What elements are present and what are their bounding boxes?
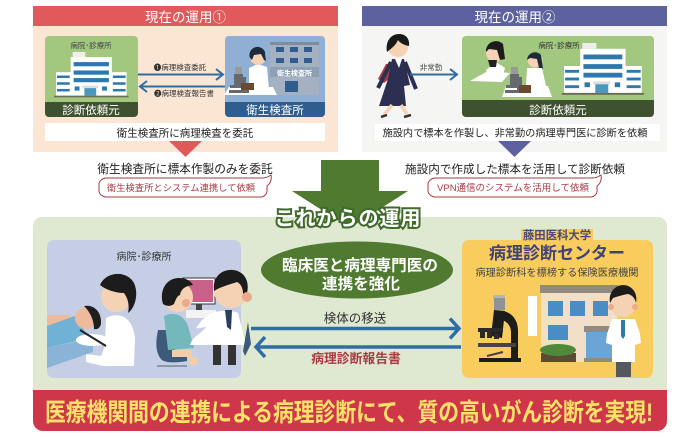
header: current operation 1: 現在の運用① [145, 10, 226, 25]
banner: conclusion [33, 390, 667, 431]
arrow: diagnosis report: 病理診断報告書 [311, 351, 401, 366]
down triangle [169, 141, 202, 157]
client clinic box: 診断依頼元 [62, 103, 120, 117]
arrow: specimen transfer: 検体の移送 [324, 310, 387, 326]
panel: pathology diagnosis center: 病理診断科を標榜する保険医療機関 [476, 266, 638, 279]
panel: pathology diagnosis center: 病理診断センター [489, 244, 625, 263]
health laboratory box [224, 36, 325, 117]
arrow: specimen transfer [251, 310, 459, 338]
heading: future operation: これからの運用 [274, 207, 420, 230]
client clinic with staff: 診断依頼元 [529, 103, 587, 117]
panel: future operation [33, 217, 667, 407]
header: current operation 2 [362, 6, 667, 26]
callout: option 2: VPN通信のシステムを活用して依頼 [437, 182, 589, 194]
illustration: endoscopy patient and doctor [47, 274, 136, 368]
caption bar: 施設内で標本を作製し、非常勤の病理専門医に診断を依頼 [383, 126, 647, 140]
arrow: part-time: 非常勤 [420, 62, 443, 72]
caption bar: 衛生検査所に病理検査を委託 [117, 126, 254, 140]
panel: pathology diagnosis center [462, 228, 653, 378]
clinic panel [47, 240, 252, 378]
health laboratory box: 衛生検査所 [277, 68, 312, 78]
illustration: patient consults doctor with monitor [156, 270, 252, 366]
panel: current operation 2 [362, 6, 667, 157]
callout: strengthen collaboration: 臨床医と病理専門医の [282, 256, 438, 274]
illustration: doctor [606, 285, 641, 377]
client clinic box [45, 36, 138, 117]
text: option 1 summary: 衛生検査所に標本作製のみを委託 [97, 162, 273, 176]
arrow: diagnosis report [256, 337, 461, 366]
client clinic box: 病院･診療所 [70, 40, 112, 50]
callout: strengthen collaboration [261, 242, 453, 298]
down triangle [498, 141, 531, 157]
illustration: clinic building [528, 285, 618, 362]
header: current operation 1 [33, 6, 338, 26]
caption bar [45, 123, 325, 141]
icon: walking woman [378, 34, 416, 117]
health laboratory box: 衛生検査所 [246, 103, 304, 117]
caption bar [375, 124, 660, 141]
arrow: request [138, 62, 223, 80]
callout: option 1 [99, 175, 271, 197]
client clinic with staff: 病院･診療所 [538, 40, 580, 50]
text: option 2 summary: 施設内で作成した標本を活用して診断依頼 [405, 162, 625, 176]
header: current operation 2: 現在の運用② [474, 10, 556, 25]
arrow: request: ❶病理検査委託 [154, 62, 207, 72]
client clinic with staff [462, 36, 654, 117]
arrow: report [140, 81, 225, 98]
callout: strengthen collaboration: 連携を強化 [322, 275, 400, 293]
callout: option 1: 衛生検査所とシステム連携して依頼 [107, 182, 256, 193]
callout: option 2 [428, 175, 601, 197]
panel: pathology diagnosis center: 藤田医科大学 [523, 228, 591, 242]
arrow: part-time [410, 62, 457, 80]
illustration: microscope [478, 295, 521, 362]
arrow: report: ❷病理検査報告書 [154, 88, 214, 98]
arrow: big green down arrow [292, 160, 408, 228]
clinic panel: 病院･診療所 [116, 250, 172, 263]
panel: current operation 1 [33, 6, 338, 157]
